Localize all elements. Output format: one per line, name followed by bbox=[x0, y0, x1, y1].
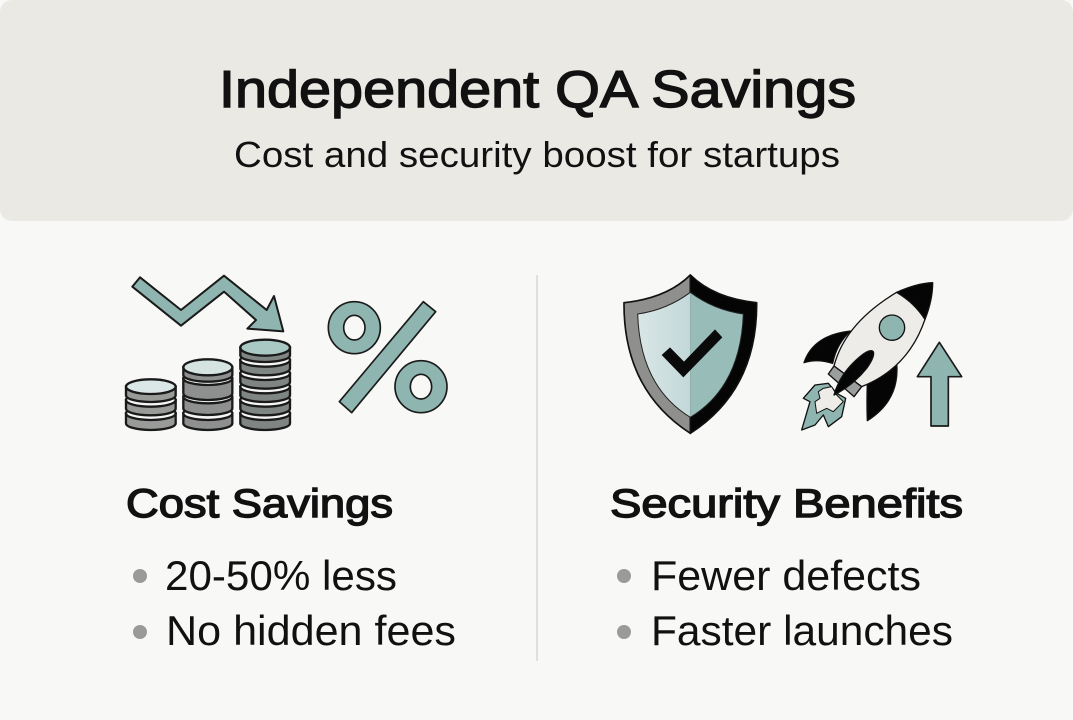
bullet: faster launches: Faster launches bbox=[651, 607, 953, 654]
bullet: fewer defects: Fewer defects bbox=[651, 552, 921, 599]
icon: check mark bbox=[662, 329, 722, 377]
heading: cost savings: Cost Savings bbox=[126, 482, 393, 526]
panel: security benefits bbox=[610, 275, 963, 654]
bullet: no hidden fees: No hidden fees bbox=[166, 607, 456, 654]
bullet: 20-50% less: 20-50% less bbox=[165, 552, 397, 599]
icon: up arrow bbox=[917, 342, 962, 426]
icon: shield with check bbox=[624, 275, 757, 433]
panel: cost savings bbox=[126, 276, 456, 654]
icon: coin stacks bbox=[126, 340, 290, 430]
title: Independent QA Savings bbox=[219, 61, 856, 119]
icon: percent sign bbox=[328, 302, 447, 413]
heading: security benefits: Security Benefits bbox=[610, 482, 963, 526]
icon: downward trend arrow bbox=[132, 276, 283, 331]
header panel bbox=[0, 0, 1073, 221]
icon: rocket bbox=[802, 283, 933, 430]
subtitle: Cost and security boost for startups bbox=[234, 134, 840, 175]
